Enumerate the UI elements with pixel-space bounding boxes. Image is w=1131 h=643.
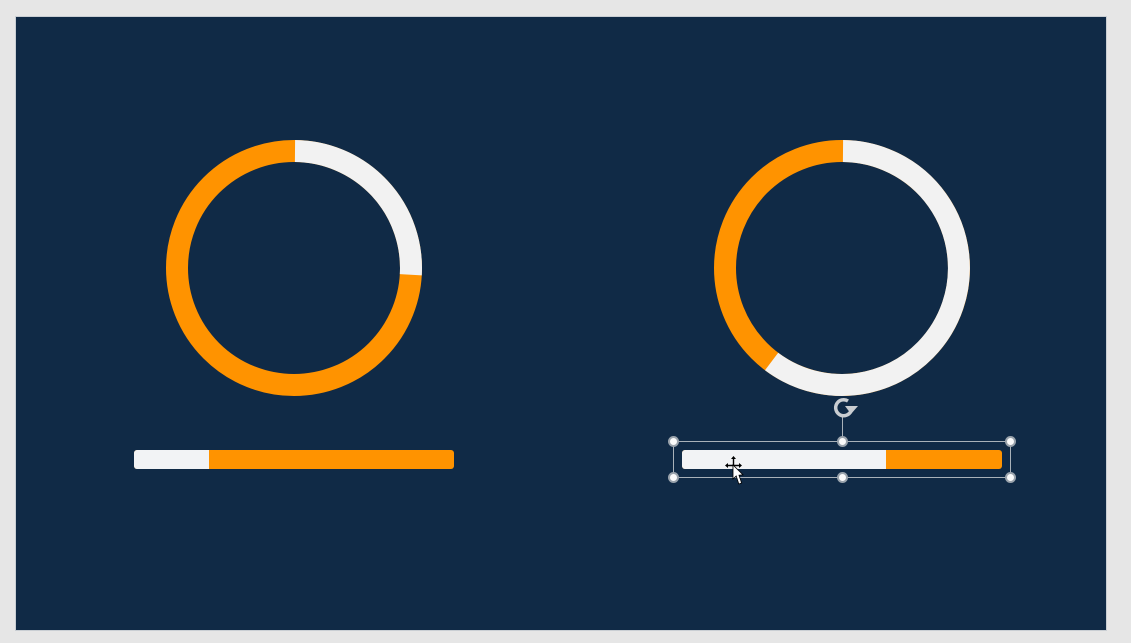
right progress ring	[725, 151, 959, 385]
left progress ring	[177, 151, 411, 385]
left progress bar	[134, 450, 454, 469]
right progress bar	[682, 450, 1002, 469]
selection box with handles	[669, 417, 1015, 482]
icon: move cursor	[725, 456, 743, 484]
icon: rotate handle	[836, 400, 858, 416]
